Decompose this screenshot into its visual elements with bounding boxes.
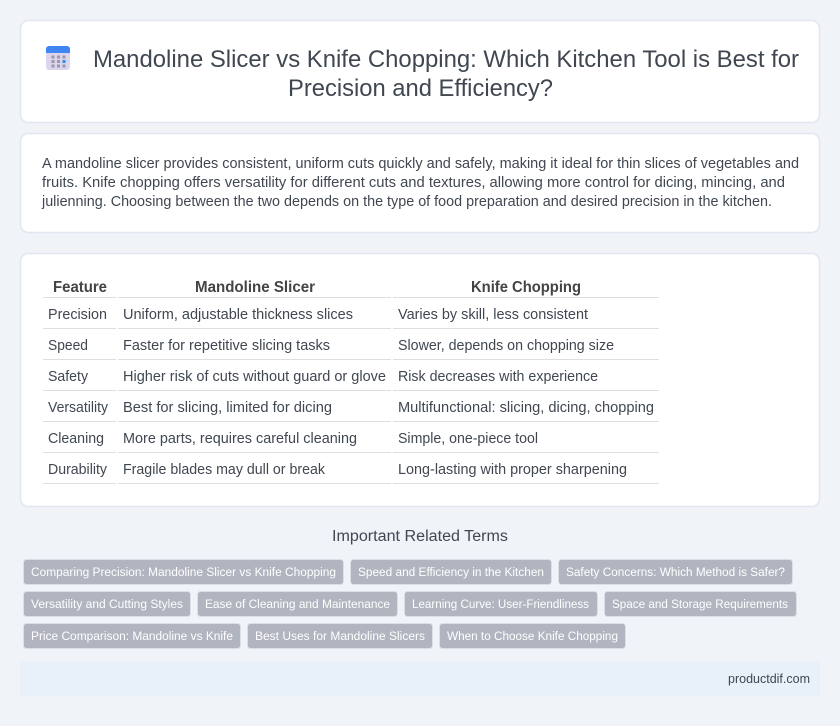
row: speed: Speed [48, 338, 88, 354]
tag [248, 624, 432, 648]
footer bar: productdif.com [728, 672, 810, 686]
tag: Comparing Precision: Mandoline Slicer vs Knife Chopping [31, 565, 336, 579]
related term tags [24, 560, 796, 648]
row: durability: Durability [48, 462, 108, 478]
tag: Ease of Cleaning and Maintenance [205, 597, 390, 611]
row: cleaning [48, 431, 538, 447]
tag [404, 592, 598, 616]
tag: Space and Storage Requirements [612, 597, 788, 611]
row: speed: Faster for repetitive slicing tasks [123, 338, 330, 354]
row: versatility: Versatility [48, 400, 109, 416]
row: precision: Varies by skill, less consistent [398, 307, 588, 323]
tag: Learning Curve: User-Friendliness [412, 597, 589, 611]
row: durability [48, 462, 627, 478]
summary paragraph card [20, 134, 820, 232]
icon: calendar [46, 46, 70, 70]
summary paragraph card: fruits. Knife chopping offers versatility for different cuts and textures, allowing more control for dicing, mincing, and [42, 175, 785, 191]
tag [24, 624, 240, 648]
row: safety [48, 369, 598, 385]
title text [93, 46, 799, 102]
row: safety: Higher risk of cuts without guard or glove [123, 369, 386, 385]
row: durability: Long-lasting with proper sharpening [398, 462, 627, 478]
row: durability: Fragile blades may dull or break [123, 462, 326, 478]
tag [558, 560, 792, 584]
tag [24, 560, 344, 584]
tag: Price Comparison: Mandoline vs Knife [31, 629, 233, 643]
tag: Safety Concerns: Which Method is Safer? [566, 565, 785, 579]
row: precision: Precision [48, 307, 107, 323]
row: safety: Risk decreases with experience [398, 369, 598, 385]
row: versatility: Multifunctional: slicing, dicing, chopping [398, 400, 654, 416]
comparison table card [20, 254, 820, 506]
title text: Mandoline Slicer vs Knife Chopping: Which Kitchen Tool is Best for [93, 46, 799, 73]
tag [604, 592, 796, 616]
tag [350, 560, 552, 584]
table header [53, 279, 581, 296]
table header: Knife Chopping [471, 279, 581, 296]
tag [198, 592, 398, 616]
summary paragraph card: A mandoline slicer provides consistent, uniform cuts quickly and safely, making it ideal for thin slices of vegetables and [42, 156, 799, 172]
row: cleaning: Cleaning [48, 431, 104, 447]
tag [24, 592, 190, 616]
footer bar [20, 662, 820, 696]
row: speed: Slower, depends on chopping size [398, 338, 614, 354]
title text: Precision and Efficiency? [288, 75, 553, 102]
tag [440, 624, 626, 648]
row: speed [48, 338, 614, 354]
title card [20, 20, 820, 122]
row: versatility [48, 400, 654, 416]
row: safety: Safety [48, 369, 89, 385]
tag: Versatility and Cutting Styles [31, 597, 183, 611]
related terms heading: Important Related Terms [332, 528, 508, 545]
row: precision: Uniform, adjustable thickness slices [123, 307, 353, 323]
tag: Speed and Efficiency in the Kitchen [358, 565, 544, 579]
row: versatility: Best for slicing, limited for dicing [123, 400, 332, 416]
tag: When to Choose Knife Chopping [447, 629, 618, 643]
table header: Feature [53, 279, 107, 296]
row: precision [48, 307, 588, 323]
row: cleaning: Simple, one-piece tool [398, 431, 538, 447]
tag: Best Uses for Mandoline Slicers [255, 629, 425, 643]
summary paragraph card: julienning. Choosing between the two depends on the type of food preparation and desired precision in the kitchen. [41, 194, 772, 210]
row: cleaning: More parts, requires careful cleaning [123, 431, 357, 447]
table header: Mandoline Slicer [195, 279, 315, 296]
